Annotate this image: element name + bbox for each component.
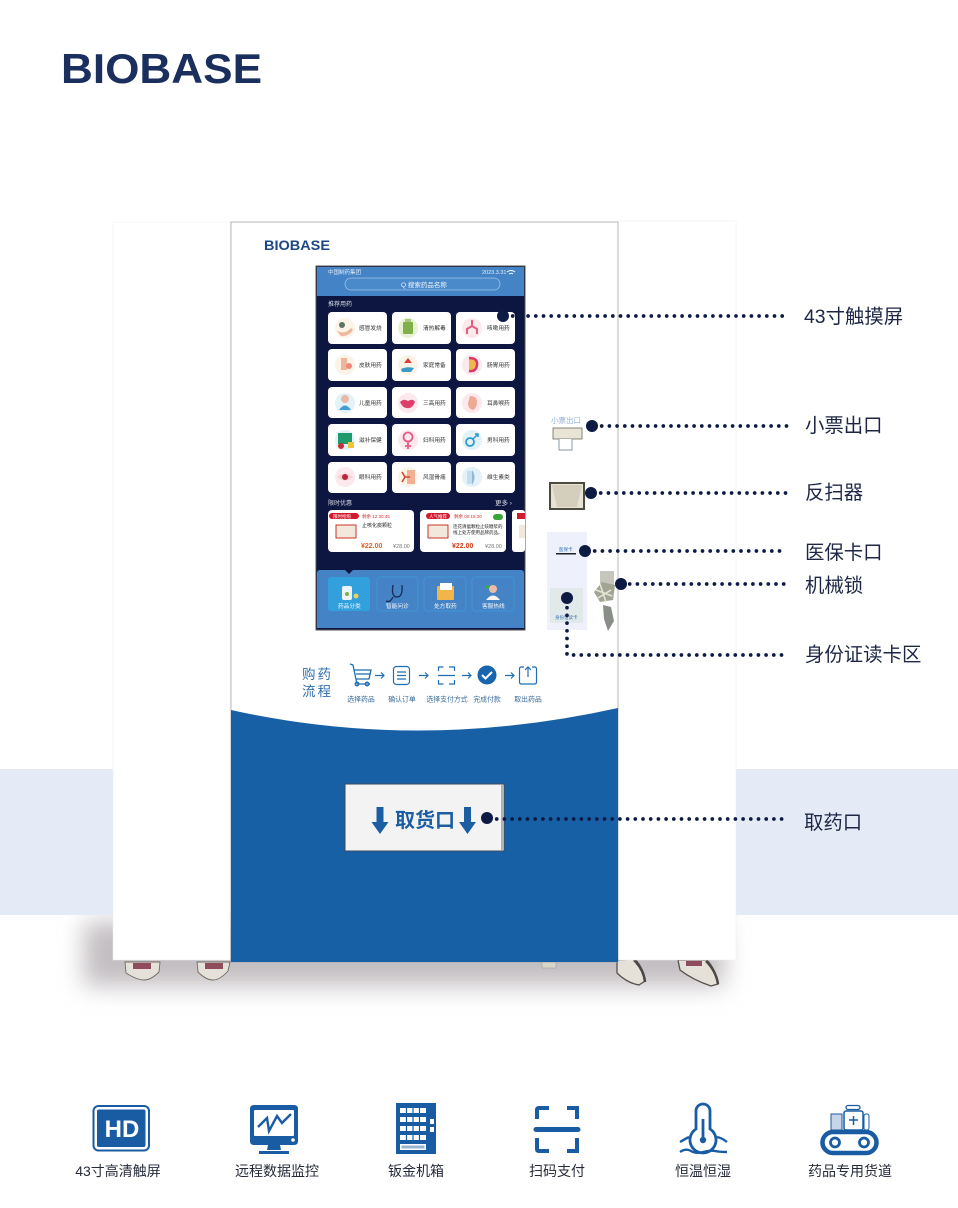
medicine category grid: 三高用药 (423, 399, 446, 407)
callout labels: 机械锁 (805, 575, 863, 597)
card reader panel: 医保卡 (559, 546, 573, 553)
screen header: 中国制药集团 (328, 268, 362, 276)
heading: recommended: 推荐用药 (328, 300, 352, 308)
icon: conveyor with medicine (822, 1106, 876, 1153)
medicine category grid: 家庭常备 (423, 361, 446, 369)
medicine category grid: 眼科用药 (359, 473, 382, 481)
icon: order (394, 666, 410, 684)
flow arrows (375, 672, 514, 678)
background band left (0, 769, 113, 915)
offer cards: 限时抢购 (333, 513, 351, 520)
offer cards: ¥28.00 (393, 544, 410, 550)
feature: scan to pay (529, 1108, 585, 1179)
bottom navigation: 智能问诊 (386, 602, 409, 610)
feature: sheet metal cabinet: 钣金机箱 (388, 1163, 444, 1179)
pickup window (345, 784, 504, 851)
more link: 更多 › (495, 498, 512, 507)
medicine category grid: 感冒发烧 (359, 324, 382, 332)
bottom navigation: 处方取药 (434, 602, 457, 610)
reverse scanner (549, 482, 585, 510)
medicine category grid: 清热解毒 (423, 324, 446, 332)
door blue lower section (231, 708, 618, 962)
offer cards (328, 510, 525, 552)
flow title (302, 667, 331, 699)
feature: HD touch screen (75, 1106, 161, 1179)
callout labels: 取药口 (804, 812, 862, 834)
callout labels (804, 306, 921, 834)
medicine category grid: 耳鼻喉药 (487, 399, 510, 407)
offer cards: 剩余 00:15:20 (454, 513, 482, 520)
mechanical lock keys (594, 571, 615, 631)
flow labels: 选择药品 (347, 694, 375, 704)
feature: remote monitoring (235, 1105, 319, 1179)
offer cards: ¥22.00 (361, 543, 383, 550)
screen header (317, 267, 524, 296)
feature: constant temperature and humidity: 恒温恒湿 (675, 1163, 731, 1179)
callout labels: 身份证读卡区 (805, 644, 921, 666)
screen header: 2023.3.31 (482, 270, 506, 276)
heading: limited offers: 限时优惠 (328, 499, 352, 507)
bottom navigation: 药品分类 (338, 602, 361, 610)
callout labels: 医保卡口 (805, 542, 883, 564)
offer cards: 止咳化痰颗粒 (362, 522, 392, 529)
background band right (736, 769, 958, 915)
icon: HD: HD (105, 1116, 139, 1143)
wheels (125, 959, 718, 986)
medicine category grid: 维生素类 (487, 473, 510, 481)
flow labels: 选择支付方式 (426, 694, 468, 704)
icon: thermometer and waves (680, 1104, 727, 1153)
offer cards: 连花清瘟颗粒止咳糖浆的 (453, 523, 503, 530)
medicine category grid: 男科用药 (487, 436, 510, 444)
feature: HD touch screen: 43寸高清触屏 (75, 1163, 161, 1179)
icon: cart (350, 664, 371, 686)
medicine category grid: 肠胃用药 (487, 361, 510, 369)
window text: 取货口 (395, 808, 455, 832)
right side panel (618, 221, 736, 960)
flow labels (347, 694, 542, 704)
icon: scan (438, 667, 455, 684)
door (231, 222, 618, 962)
medicine category grid: 风湿骨痛 (423, 473, 446, 481)
medicine category grid: 妇科用药 (423, 436, 446, 444)
feature: constant temperature and humidity (675, 1104, 731, 1179)
medicine category grid (328, 312, 515, 493)
screen header: Q 搜索药品名称 (401, 280, 447, 289)
bottom navigation: 客服热线 (482, 602, 505, 610)
floor shadow (84, 922, 724, 986)
arrow right (459, 807, 476, 834)
medicine category grid: 咳嗽用药 (487, 324, 510, 332)
feature: sheet metal cabinet (388, 1103, 444, 1179)
cabinet (113, 221, 736, 962)
medicine category grid: 滋补保健 (359, 436, 382, 444)
icon: paid check (478, 666, 496, 684)
offer cards: 剩余 12:30:45 (362, 513, 390, 520)
receipt outlet (551, 415, 582, 450)
feature: remote monitoring: 远程数据监控 (235, 1163, 319, 1179)
medicine category grid: 皮肤用药 (359, 361, 382, 369)
card reader panel: 身份证读卡 (555, 614, 578, 621)
offer cards: 人气推荐 (429, 513, 447, 520)
purchase flow (302, 664, 542, 704)
left side panel (113, 222, 230, 960)
callout anchor dots (481, 310, 627, 824)
card reader panel (547, 532, 587, 630)
flow title: 流程 (302, 684, 331, 699)
flow title: 购药 (302, 667, 331, 682)
flow labels: 完成付款 (473, 694, 501, 704)
feature: medicine lanes (808, 1106, 892, 1179)
callout labels: 反扫器 (805, 482, 863, 504)
icon: monitor (250, 1105, 298, 1154)
bottom navigation (317, 570, 524, 628)
feature: medicine lanes: 药品专用货道 (808, 1163, 892, 1179)
offer cards: ¥28.00 (485, 544, 502, 550)
icon: vending machine (396, 1103, 436, 1154)
medicine category grid: 儿童用药 (359, 399, 382, 407)
icon: scan (536, 1108, 578, 1151)
flow labels: 取出药品 (514, 694, 542, 704)
arrow left (372, 807, 388, 834)
callout labels: 小票出口 (805, 415, 883, 437)
icon: pick up (520, 667, 536, 684)
door logo: BIOBASE (264, 238, 330, 253)
callout labels: 43寸触摸屏 (804, 306, 903, 328)
flow labels: 确认订单 (388, 694, 416, 704)
receipt outlet: 小票出口 (551, 415, 581, 425)
callout dotted leaders (489, 316, 787, 819)
offer cards: 线上处方使用品牌药品。 (453, 529, 502, 536)
offer cards: ¥22.00 (452, 543, 474, 550)
feature: scan to pay: 扫码支付 (529, 1163, 585, 1179)
touch screen (316, 266, 525, 630)
brand logo: BIOBASE (61, 45, 262, 92)
